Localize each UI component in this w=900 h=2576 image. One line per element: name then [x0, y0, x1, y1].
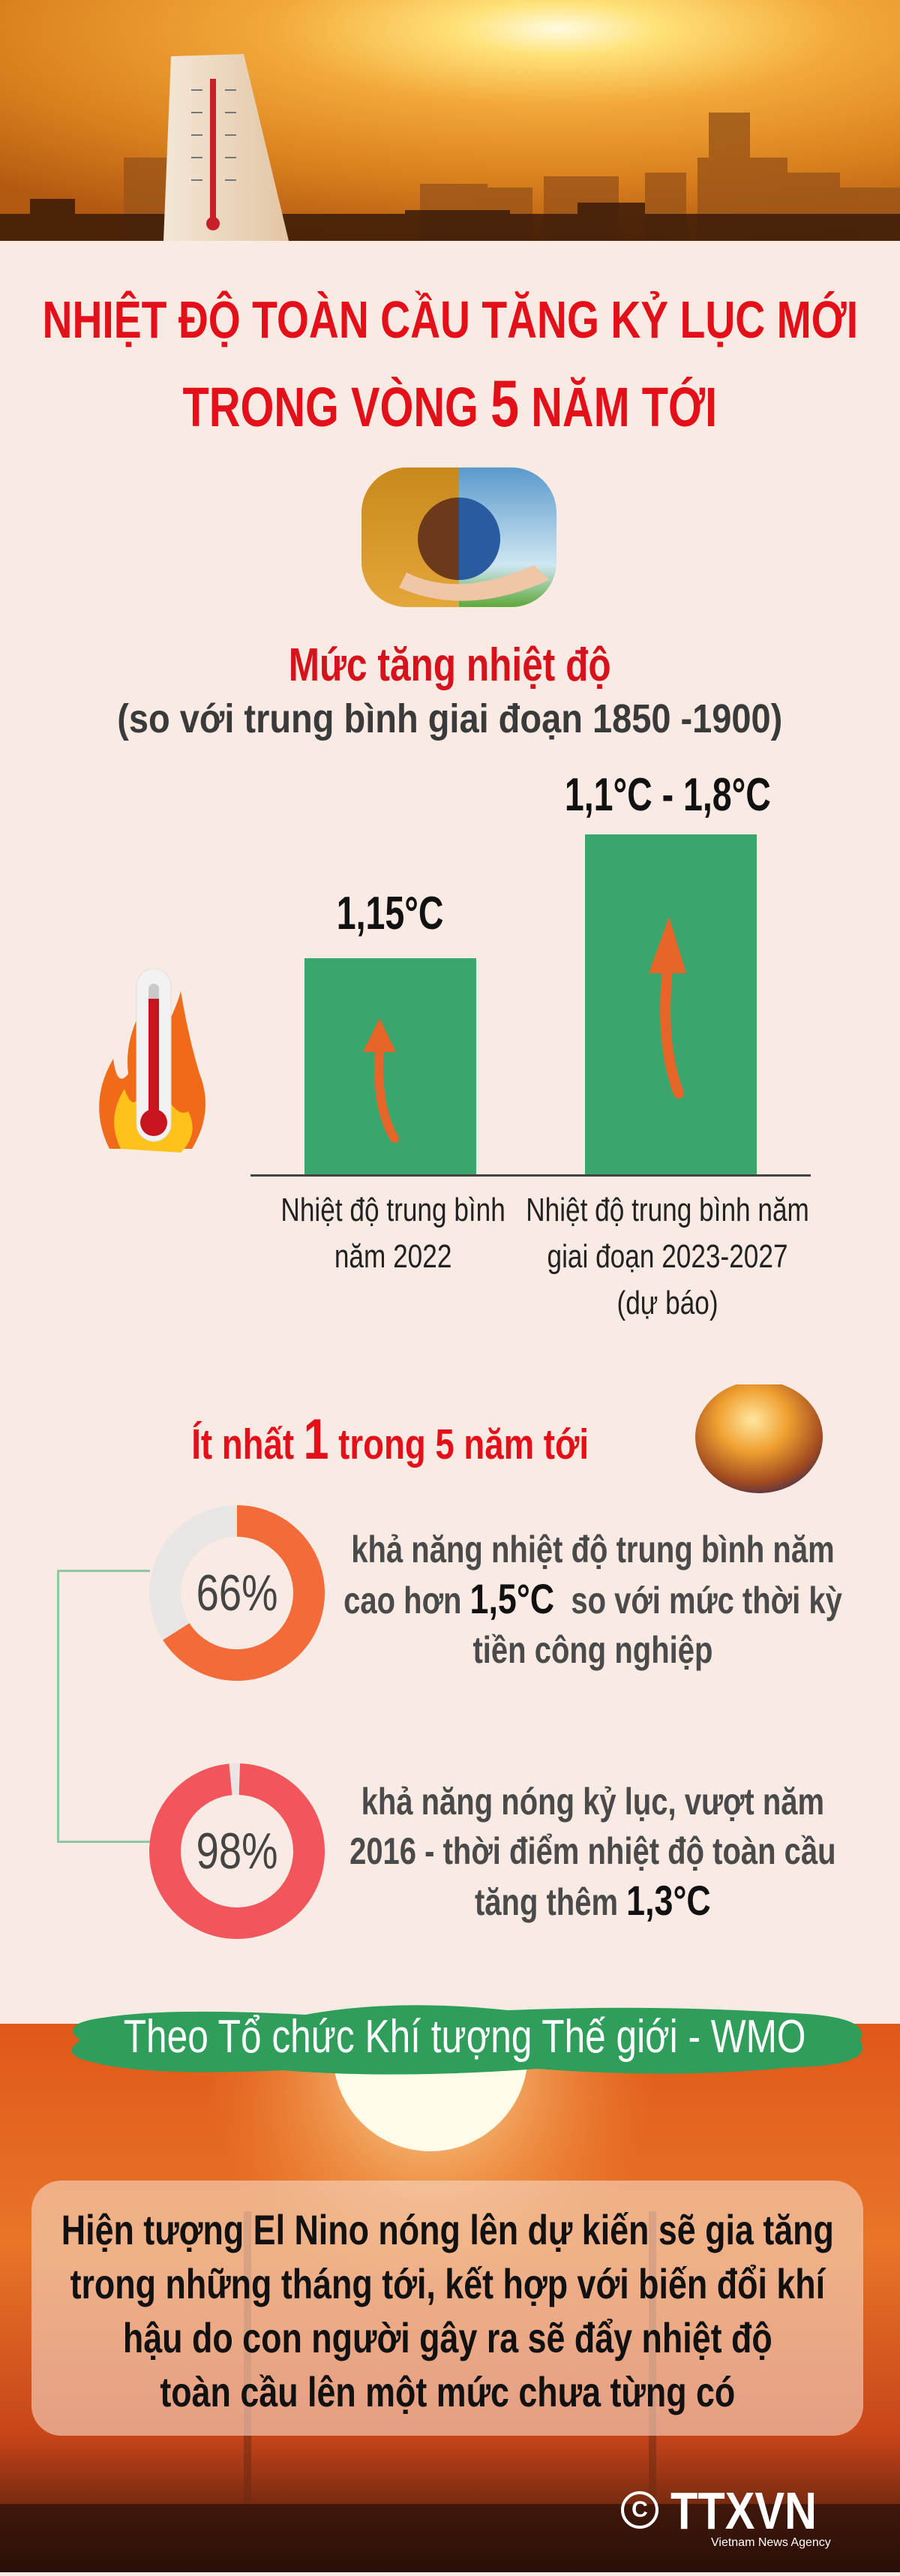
text: 66% description: tiền công nghiệp — [472, 1629, 712, 1671]
logo: TTXVN — [621, 2481, 831, 2549]
title: TRONG VÒNG 5 NĂM TỚI — [183, 366, 717, 440]
axis label: 2023-2027: Nhiệt độ trung bình năm — [526, 1192, 809, 1228]
callout: El Nino text box: trong những tháng tới, kết hợp với biến đổi khí — [70, 2260, 825, 2307]
logo: TTXVN: TTXVN — [670, 2481, 817, 2540]
axis label: 2023-2027 — [526, 1192, 809, 1321]
donut: 98%: 98% — [196, 1823, 278, 1880]
text: 66% description: khả năng nhiệt độ trung bình năm — [351, 1528, 834, 1571]
text: 66% description — [344, 1528, 842, 1671]
icon: earth half burnt half green — [362, 467, 556, 607]
axis label: 2023-2027: (dự báo) — [616, 1285, 718, 1321]
donut: 98% — [149, 1763, 325, 1939]
title — [42, 290, 858, 440]
chart subtitle — [117, 639, 783, 741]
callout: El Nino text box: hậu do con người gây ra sẽ đẩy nhiệt độ — [123, 2314, 772, 2361]
bottom sunset background — [0, 2024, 900, 2572]
banner: WMO source — [72, 2005, 862, 2074]
header photo: heat city with thermometer — [0, 0, 900, 241]
banner: WMO source: Theo Tổ chức Khí tượng Thế giới - WMO — [124, 2011, 806, 2063]
chart subtitle: Mức tăng nhiệt độ — [289, 639, 611, 691]
bar: 2022 — [304, 958, 476, 1175]
text: 98% description — [350, 1781, 836, 1924]
bar: 2023-2027 — [585, 834, 757, 1175]
callout: El Nino text box: toàn cầu lên một mức chưa từng có — [160, 2368, 735, 2415]
heading: at least 1 in 5 years: Ít nhất 1 trong 5 năm tới — [191, 1408, 589, 1471]
donut: 66% — [149, 1505, 325, 1681]
callout: El Nino text box: Hiện tượng El Nino nóng lên dự kiến sẽ gia tăng — [61, 2206, 834, 2253]
text: 98% description: 2016 - thời điểm nhiệt độ toàn cầu — [350, 1830, 836, 1872]
bar chart — [250, 769, 811, 1177]
label: 1,15°C: 1,15°C — [337, 888, 443, 939]
icon: burning globe — [695, 1384, 823, 1493]
icon: thermometer — [164, 54, 289, 241]
axis label: 2022 — [280, 1192, 506, 1275]
axis label: 2023-2027: giai đoạn 2023-2027 — [548, 1238, 788, 1275]
text: 98% description: khả năng nóng kỷ lục, vượt năm — [361, 1781, 824, 1823]
text: 98% description: tăng thêm 1,3°C — [475, 1877, 710, 1924]
chart subtitle: (so với trung bình giai đoạn 1850 -1900) — [117, 696, 783, 741]
axis label: 2022: năm 2022 — [334, 1238, 452, 1275]
icon: thermometer in flames — [99, 969, 206, 1153]
title: NHIỆT ĐỘ TOÀN CẦU TĂNG KỶ LỤC MỚI — [42, 290, 858, 349]
donut: 66%: 66% — [196, 1565, 278, 1622]
logo: TTXVN: C — [632, 2497, 648, 2522]
label: 1,1°C - 1,8°C: 1,1°C - 1,8°C — [565, 769, 770, 821]
callout: El Nino text box — [32, 2181, 863, 2436]
axis label: 2022: Nhiệt độ trung bình — [280, 1192, 506, 1228]
text: 66% description: cao hơn 1,5°C so với mức thời kỳ — [344, 1575, 842, 1622]
connector line — [57, 1570, 150, 1843]
logo: TTXVN: Vietnam News Agency — [711, 2536, 831, 2549]
axis baseline — [250, 1174, 811, 1177]
